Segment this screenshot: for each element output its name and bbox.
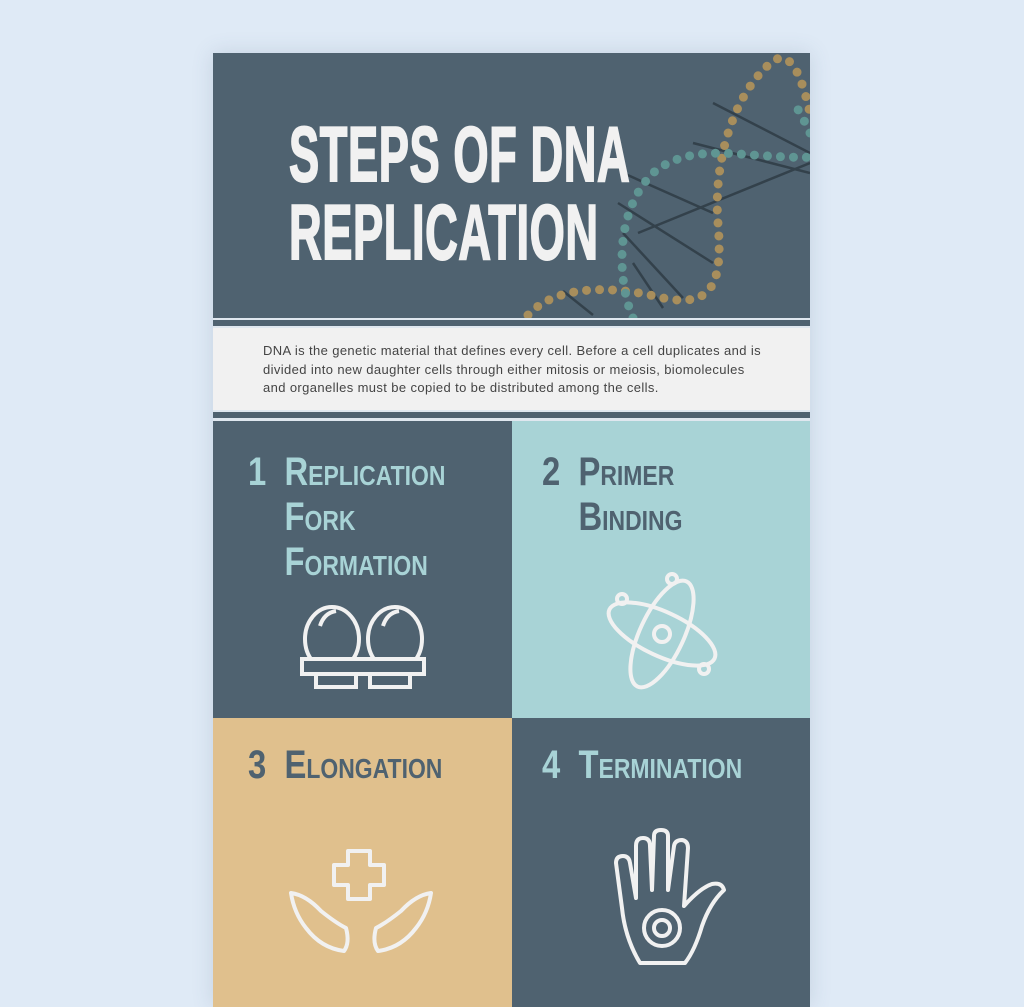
intro band — [213, 318, 810, 421]
heading 2 — [542, 450, 683, 539]
icon: hand — [614, 828, 726, 965]
panel: step 4 — [512, 718, 810, 1007]
heading 4: 4 Termination — [542, 743, 742, 787]
card — [213, 53, 810, 1007]
heading 2: 2 Primer — [542, 450, 674, 494]
heading 2: Binding — [578, 495, 683, 539]
icon: atom — [606, 572, 718, 690]
icon: hands with cross — [289, 849, 433, 953]
header panel — [213, 53, 810, 318]
heading 3: 3 Elongation — [248, 743, 442, 787]
heading 1 — [248, 450, 445, 584]
icon: eggs — [300, 605, 426, 689]
intro text: DNA is the genetic material that defines every cell. Before a cell duplicates and is — [263, 343, 761, 358]
intro text — [263, 343, 761, 395]
heading 1: Fork — [284, 495, 356, 539]
title — [289, 110, 630, 276]
title: STEPS OF DNA — [289, 110, 630, 198]
heading 1: Formation — [284, 540, 428, 584]
panel: step 1 — [213, 421, 512, 718]
intro text: divided into new daughter cells through either mitosis or meiosis, biomolecules — [263, 362, 745, 376]
intro text: and organelles must be copied to be distributed among the cells. — [263, 380, 659, 395]
title: REPLICATION — [289, 188, 599, 276]
dna helix decoration — [524, 54, 810, 318]
panel: step 2 — [512, 421, 810, 718]
heading 1: 1 Replication — [248, 450, 445, 494]
panel: step 3 — [213, 718, 512, 1007]
